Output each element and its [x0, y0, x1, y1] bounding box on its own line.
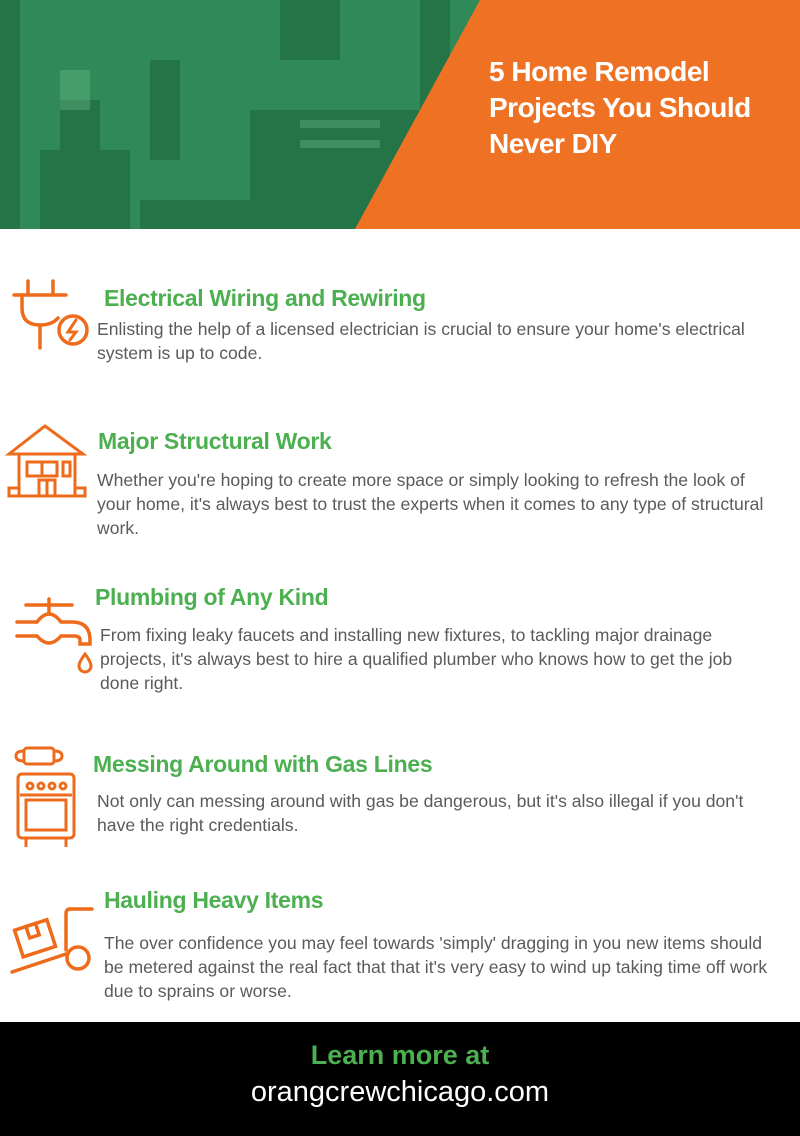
text: plumbing	[100, 625, 732, 693]
text: electrical	[97, 319, 745, 363]
footer: learn more: Learn more at	[311, 1040, 489, 1070]
icon: house	[5, 424, 87, 498]
heading: electrical: Electrical Wiring and Rewiring	[104, 285, 426, 311]
text: structural: your home, it's always best to trust the experts when it comes to any type of structural	[97, 494, 763, 514]
footer	[0, 1022, 800, 1136]
text: electrical: Enlisting the help of a licensed electrician is crucial to ensure your home's electrical	[97, 319, 745, 339]
heading: plumbing: Plumbing of Any Kind	[95, 584, 328, 610]
footer: url: orangcrewchicago.com	[251, 1076, 549, 1108]
text: structural	[97, 470, 763, 538]
text: plumbing: done right.	[100, 673, 183, 693]
icon: faucet	[15, 597, 92, 674]
heading: gas: Messing Around with Gas Lines	[93, 751, 432, 777]
text: gas: Not only can messing around with gas be dangerous, but it's also illegal if you don't	[97, 791, 743, 811]
title: Never DIY	[489, 128, 617, 159]
heading: structural: Major Structural Work	[98, 428, 332, 454]
text: gas: have the right credentials.	[97, 815, 298, 835]
text: hauling: be metered against the real fact that that it's very easy to wind up taking time off work	[104, 957, 767, 977]
icon: stove	[14, 746, 76, 847]
title	[489, 56, 751, 159]
text: electrical: system is up to code.	[97, 343, 262, 363]
title: 5 Home Remodel	[489, 56, 709, 87]
heading: hauling: Hauling Heavy Items	[104, 887, 323, 913]
orange title panel	[355, 0, 800, 229]
text: hauling: due to sprains or worse.	[104, 981, 292, 1001]
icon: hand truck	[10, 907, 94, 974]
text: hauling	[104, 933, 768, 1001]
text: gas	[97, 791, 744, 835]
title: Projects You Should	[489, 92, 751, 123]
text: plumbing: projects, it's always best to hire a qualified plumber who knows how to get the job	[100, 649, 732, 669]
text: structural: work.	[97, 518, 139, 538]
text: structural: Whether you're hoping to create more space or simply looking to refresh the look of	[97, 470, 745, 490]
text: hauling: The over confidence you may feel towards 'simply' dragging in you new items should	[104, 933, 762, 953]
text: plumbing: From fixing leaky faucets and installing new fixtures, to tackling major drainage	[100, 625, 712, 645]
icon: plug	[12, 279, 89, 350]
header banner	[0, 0, 800, 229]
